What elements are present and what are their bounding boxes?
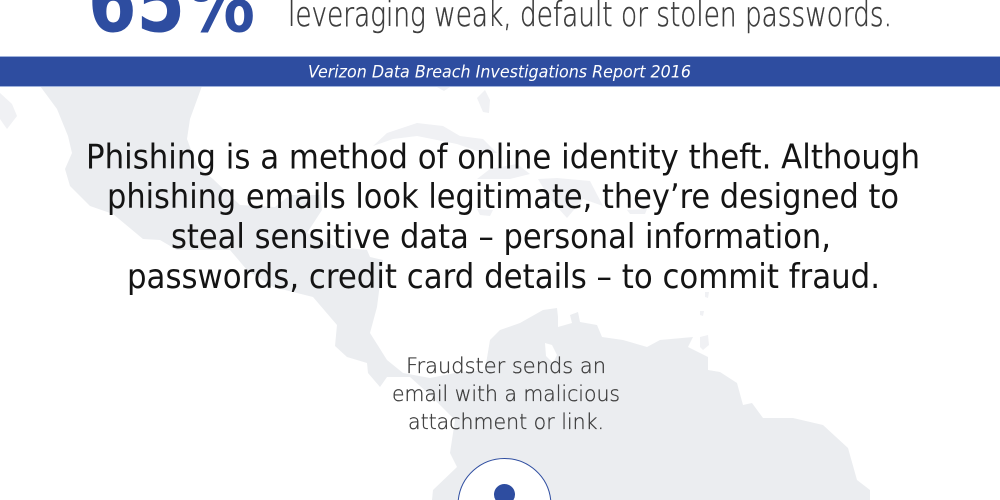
phishing definition paragraph: Phishing is a method of online identity theft. Although	[86, 138, 920, 178]
phishing definition paragraph: steal sensitive data – personal information,	[171, 217, 831, 257]
map: Cuba	[373, 123, 497, 153]
phishing definition paragraph	[86, 138, 920, 297]
map: Hispaniola	[538, 178, 603, 218]
phishing definition paragraph: passwords, credit card details – to commit fraud.	[127, 257, 880, 297]
source text: Verizon Data Breach Investigations Report 2016	[308, 62, 691, 82]
step 1 description	[392, 354, 620, 435]
map: Jamaica area	[477, 164, 530, 179]
step 1 description: Fraudster sends an	[406, 354, 606, 379]
step 1 description: attachment or link.	[408, 410, 604, 435]
map: Mexico, Central and South America	[40, 86, 870, 500]
phishing definition paragraph: phishing emails look legitimate, they’re designed to	[107, 177, 899, 217]
source banner	[0, 56, 1000, 87]
icon: step circle with dot	[458, 459, 551, 500]
map: small Caribbean islands	[477, 209, 709, 350]
map: Florida tip	[437, 87, 450, 91]
map: Bahamas	[477, 90, 490, 113]
background map: Central America and Caribbean	[0, 86, 870, 500]
map: Baja California	[0, 93, 17, 129]
step 1 description: email with a malicious	[392, 382, 620, 407]
